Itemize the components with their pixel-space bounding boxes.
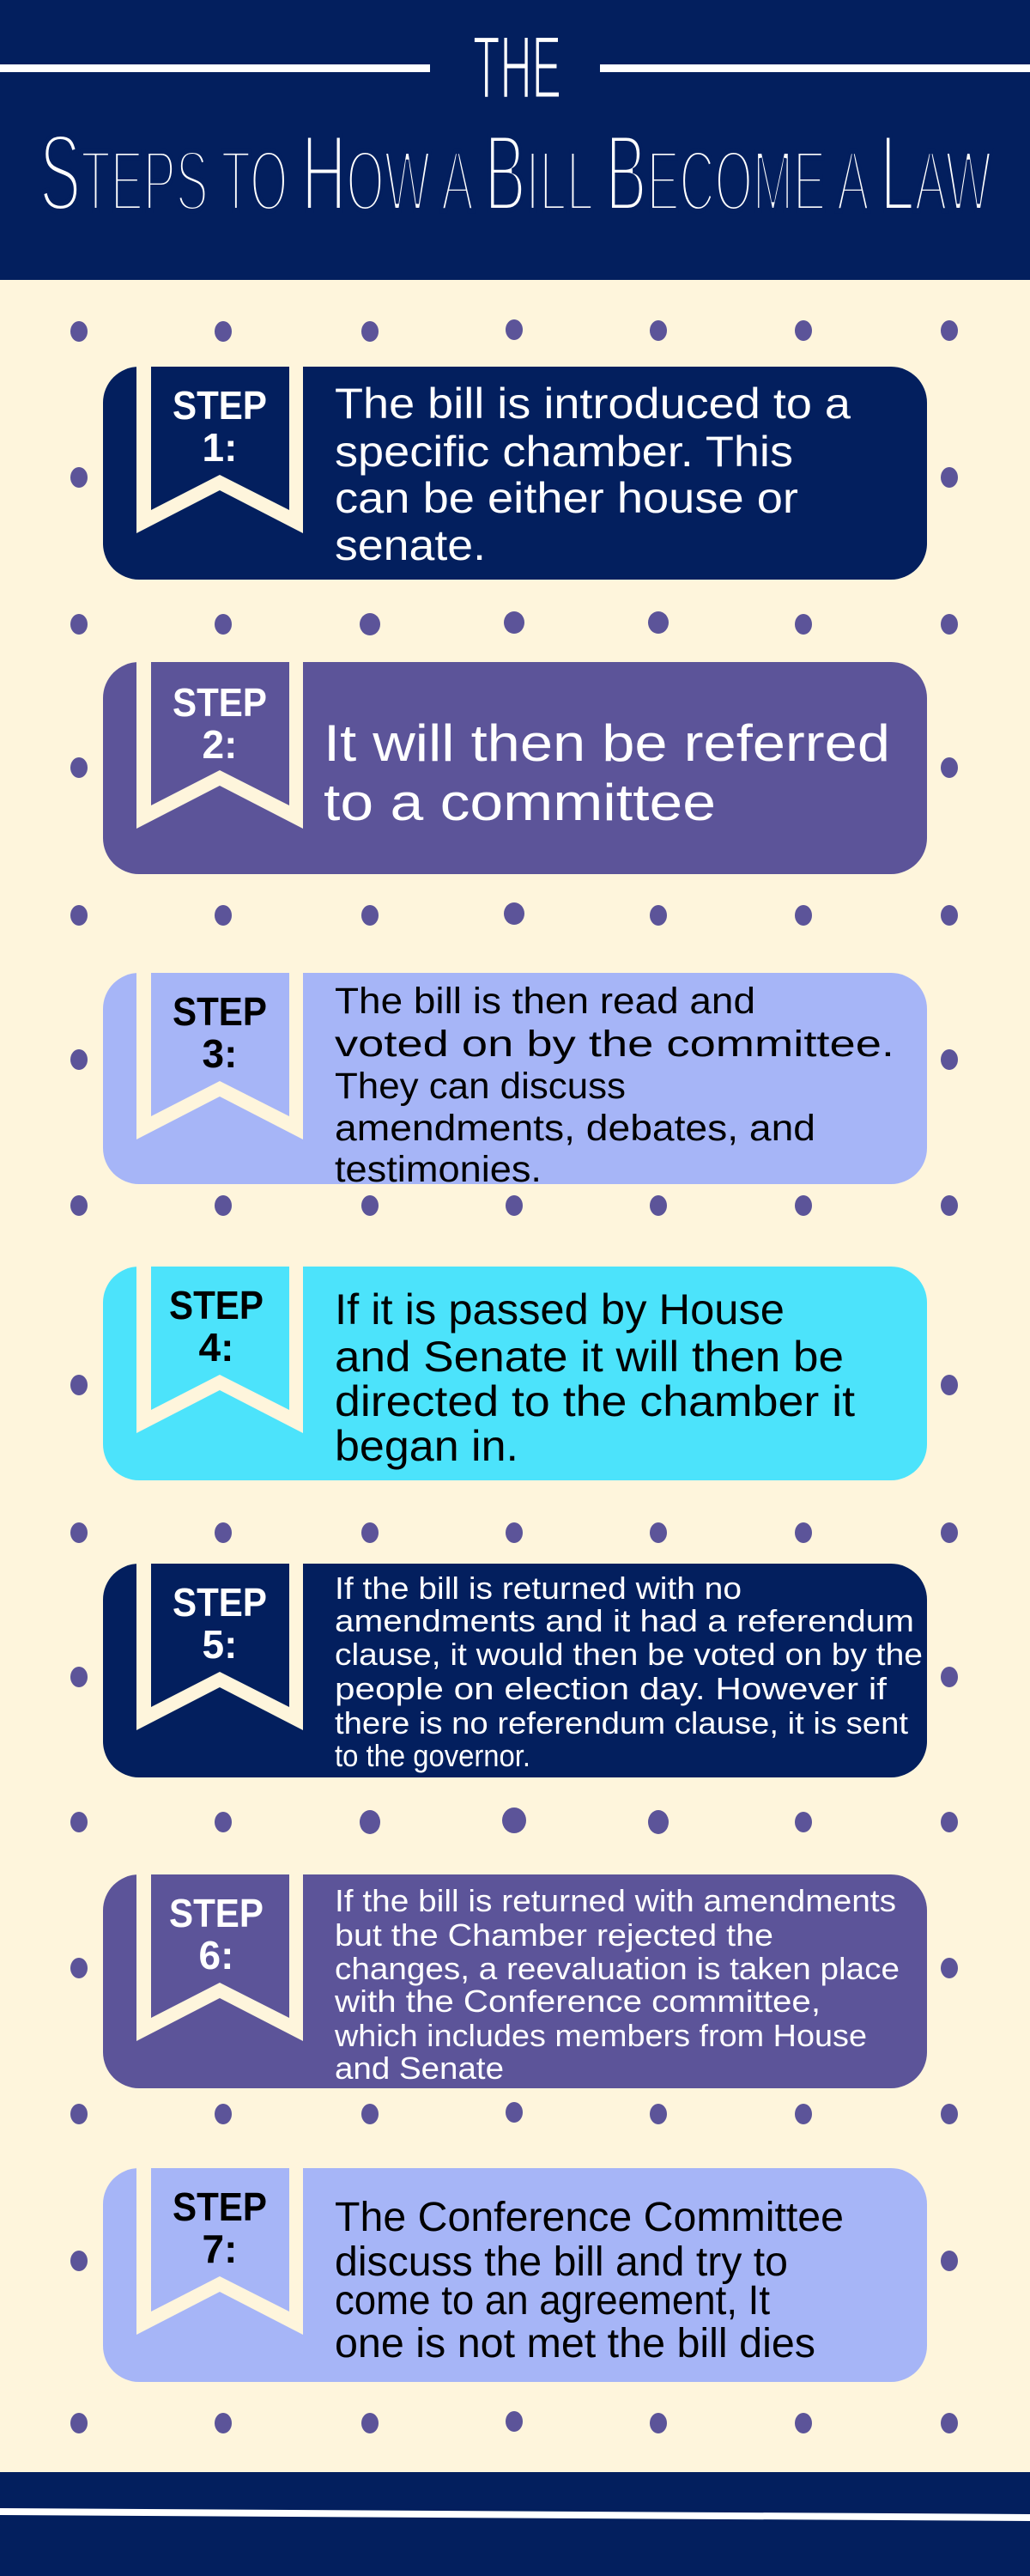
icon: ribbon 5 — [136, 1564, 303, 1730]
label: step 1: 1: — [203, 425, 237, 470]
icon: ribbon 4 — [136, 1267, 303, 1433]
text: step 1: can be either house or — [335, 474, 798, 522]
text: step 6: and Senate — [335, 2050, 504, 2086]
text: step 7: The Conference Committee — [335, 2195, 844, 2240]
label: step 3 — [173, 989, 267, 1076]
text: step 2 — [324, 714, 890, 831]
text: step 5: there is no referendum clause, it is sent — [335, 1705, 908, 1741]
text: step 5: If the bill is returned with no — [335, 1571, 742, 1606]
label: step 5: 5: — [203, 1622, 237, 1667]
label: step 2: 2: — [203, 722, 237, 767]
text: step 5 — [335, 1571, 923, 1773]
label: step 7 — [173, 2184, 267, 2271]
text: step 1 — [335, 380, 851, 569]
text: step 6: changes, a reevaluation is taken place — [335, 1951, 900, 1986]
text: step 1: specific chamber. This — [335, 428, 793, 476]
label: step 5: STEP — [173, 1580, 267, 1625]
panel: step 4 — [103, 1267, 927, 1480]
panel: step 1 — [103, 367, 927, 580]
text: step 3 — [335, 981, 894, 1190]
text: step 4: and Senate it will then be — [335, 1333, 844, 1381]
panel: step 2 — [103, 662, 927, 874]
label: step 7: 7: — [203, 2227, 237, 2271]
text: step 7: come to an agreement, It — [335, 2278, 770, 2324]
dot pattern — [70, 319, 958, 2433]
label: step 4: 4: — [199, 1325, 233, 1370]
text: step 6: which includes members from House — [334, 2018, 867, 2053]
icon: ribbon 1 — [136, 367, 303, 533]
text: step 3: voted on by the committee. — [335, 1024, 894, 1065]
text: step 6 — [334, 1883, 900, 2086]
icon: ribbon 2 — [136, 662, 303, 829]
panel: step 5 — [103, 1564, 927, 1777]
text: step 3: The bill is then read and — [335, 981, 755, 1022]
text: step 5: clause, it would then be voted on by the — [335, 1637, 923, 1672]
label: step 2: STEP — [173, 680, 267, 725]
text: step 4: If it is passed by House — [335, 1285, 785, 1334]
text: step 2: It will then be referred — [324, 714, 890, 772]
text: step 3: testimonies. — [335, 1149, 542, 1190]
panel: step 7 — [103, 2168, 927, 2382]
label: step 6: 6: — [199, 1933, 233, 1978]
text: step 1: The bill is introduced to a — [335, 380, 851, 428]
icon: ribbon 7 — [136, 2168, 303, 2335]
label: step 7: STEP — [173, 2184, 267, 2229]
text: step 4: directed to the chamber it — [335, 1377, 855, 1425]
text: step 7 — [335, 2195, 844, 2366]
label: step 3: STEP — [173, 989, 267, 1034]
text: step 2: to a committee — [324, 774, 716, 831]
panel: step 3 — [103, 973, 927, 1190]
text: step 1: senate. — [335, 521, 486, 569]
label: step 6 — [169, 1891, 264, 1978]
title: STEPS TO HOW A BILL BECOME A LAW — [39, 112, 991, 234]
text: step 7: discuss the bill and try to — [335, 2239, 788, 2285]
header band: THE — [473, 18, 561, 118]
text: step 4: began in. — [335, 1422, 518, 1470]
text: step 3: amendments, debates, and — [335, 1108, 815, 1149]
text: step 4 — [335, 1285, 855, 1470]
label: step 2 — [173, 680, 267, 767]
text: step 3: They can discuss — [335, 1066, 626, 1107]
header band — [0, 0, 1030, 280]
label: step 6: STEP — [169, 1891, 264, 1935]
text: step 7: one is not met the bill dies — [335, 2321, 815, 2366]
text: step 6: with the Conference committee, — [334, 1984, 821, 2019]
text: step 6: but the Chamber rejected the — [335, 1917, 773, 1953]
label: step 1: STEP — [173, 383, 267, 428]
label: step 3: 3: — [203, 1031, 237, 1076]
footer band — [0, 2472, 1030, 2576]
label: step 5 — [173, 1580, 267, 1667]
label: step 4 — [169, 1283, 264, 1370]
icon: ribbon 6 — [136, 1874, 303, 2041]
icon: ribbon 3 — [136, 973, 303, 1139]
label: step 4: STEP — [169, 1283, 264, 1327]
label: step 1 — [173, 383, 267, 470]
text: step 6: If the bill is returned with amendments — [335, 1883, 896, 1918]
text: step 5: amendments and it had a referendum — [335, 1603, 914, 1638]
panel: step 6 — [103, 1874, 927, 2088]
text: step 5: to the governor. — [335, 1738, 530, 1773]
text: step 5: people on election day. However if — [335, 1671, 888, 1706]
